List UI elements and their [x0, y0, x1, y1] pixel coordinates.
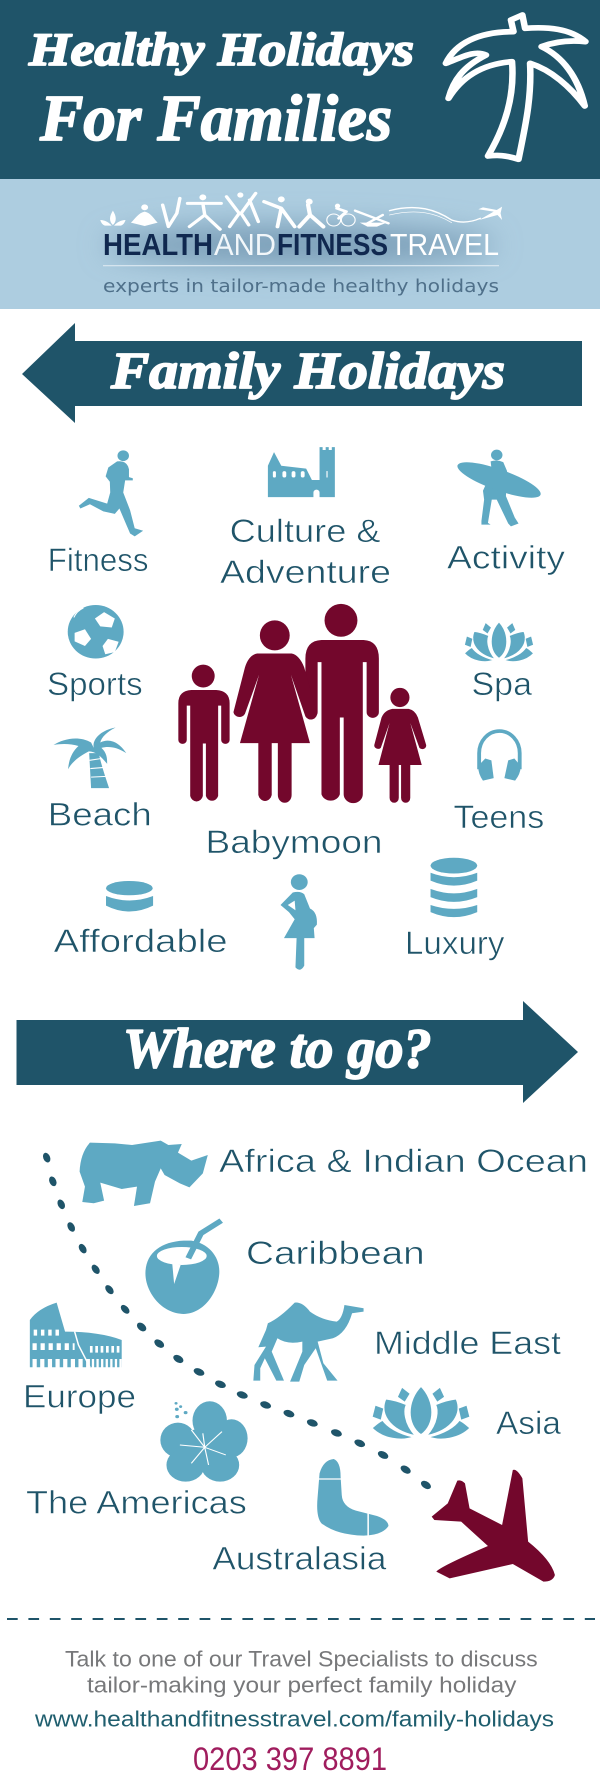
website url: www.healthandfitnesstravel.com/family-holidays [34, 1707, 554, 1732]
arrow heading: Where to go?: Where to go? [123, 1018, 432, 1080]
label: Culture & Adventure: Culture & [230, 513, 381, 549]
logo wordmark: TRAVEL [390, 227, 499, 262]
icon: football [68, 605, 124, 659]
label: Fitness: Fitness [48, 542, 148, 578]
icon: coin stack large [431, 858, 477, 917]
label: Culture & Adventure: Adventure [220, 554, 391, 590]
label: Sports: Sports [47, 666, 143, 702]
label: Culture & Adventure [220, 513, 391, 590]
call to action text [65, 1647, 538, 1698]
label: Affordable: Affordable [54, 923, 228, 959]
father [305, 604, 379, 803]
label: Africa & Indian Ocean: Africa & Indian Ocean [219, 1143, 588, 1179]
panel: destinations [23, 1141, 588, 1582]
logo wordmark: FITNESS [277, 227, 388, 262]
panel: header [0, 0, 600, 179]
icon: pregnant woman [281, 874, 317, 970]
label: Activity: Activity [447, 540, 565, 576]
label: The Americas: The Americas [26, 1484, 247, 1520]
icon: headphones [478, 731, 521, 781]
logo wordmark: AND [214, 227, 276, 262]
icon: boomerang [317, 1459, 388, 1537]
panel: family holiday types [47, 447, 565, 970]
icon: runner [79, 450, 143, 536]
icon: colosseum [30, 1303, 122, 1367]
icon: rhino [80, 1141, 208, 1206]
label: Middle East: Middle East [374, 1325, 561, 1361]
label: Beach: Beach [48, 797, 152, 833]
label: Teens: Teens [454, 799, 544, 835]
label: Europe: Europe [23, 1378, 136, 1414]
icon: surfer [454, 450, 544, 526]
title line 2: For Families [39, 82, 392, 155]
icon: castle [268, 447, 335, 497]
arrow heading: Where to go? [16, 1001, 578, 1103]
panel: contact footer [34, 1647, 554, 1777]
mother [233, 620, 317, 803]
dotted flight path [42, 1152, 433, 1491]
icon: palm tree outline [446, 15, 586, 159]
icon: lotus large [372, 1386, 470, 1439]
call to action text: tailor-making your perfect family holiday [87, 1673, 516, 1698]
icon: camel [253, 1303, 364, 1382]
label: Babymoon: Babymoon [206, 824, 382, 860]
family figures [178, 604, 426, 803]
icon: palm tree [54, 727, 126, 788]
icon: coconut [145, 1221, 221, 1314]
icon: aeroplane [432, 1470, 555, 1582]
call to action text: Talk to one of our Travel Specialists to discuss [65, 1647, 538, 1672]
icon: hibiscus flower [160, 1401, 248, 1482]
icon: lotus [464, 622, 534, 662]
title line 1: Healthy Holidays [28, 24, 414, 76]
logo tagline: experts in tailor-made healthy holidays [103, 276, 499, 297]
logo wordmark [103, 227, 499, 262]
label: Asia: Asia [496, 1405, 561, 1441]
logo wordmark: HEALTH [103, 227, 213, 262]
boy [178, 665, 230, 801]
logo activity silhouettes [100, 192, 502, 229]
arrow heading: Family Holidays [22, 323, 582, 423]
icon: coin stack small [106, 881, 153, 912]
label: Australasia: Australasia [212, 1540, 387, 1576]
label: Spa: Spa [472, 666, 532, 702]
label: Luxury: Luxury [405, 925, 504, 961]
girl [374, 688, 426, 803]
panel: logo band [0, 179, 600, 309]
label: Caribbean: Caribbean [246, 1235, 425, 1271]
arrow heading: Family Holidays: Family Holidays [110, 343, 505, 400]
phone number: 0203 397 8891 [193, 1741, 387, 1777]
